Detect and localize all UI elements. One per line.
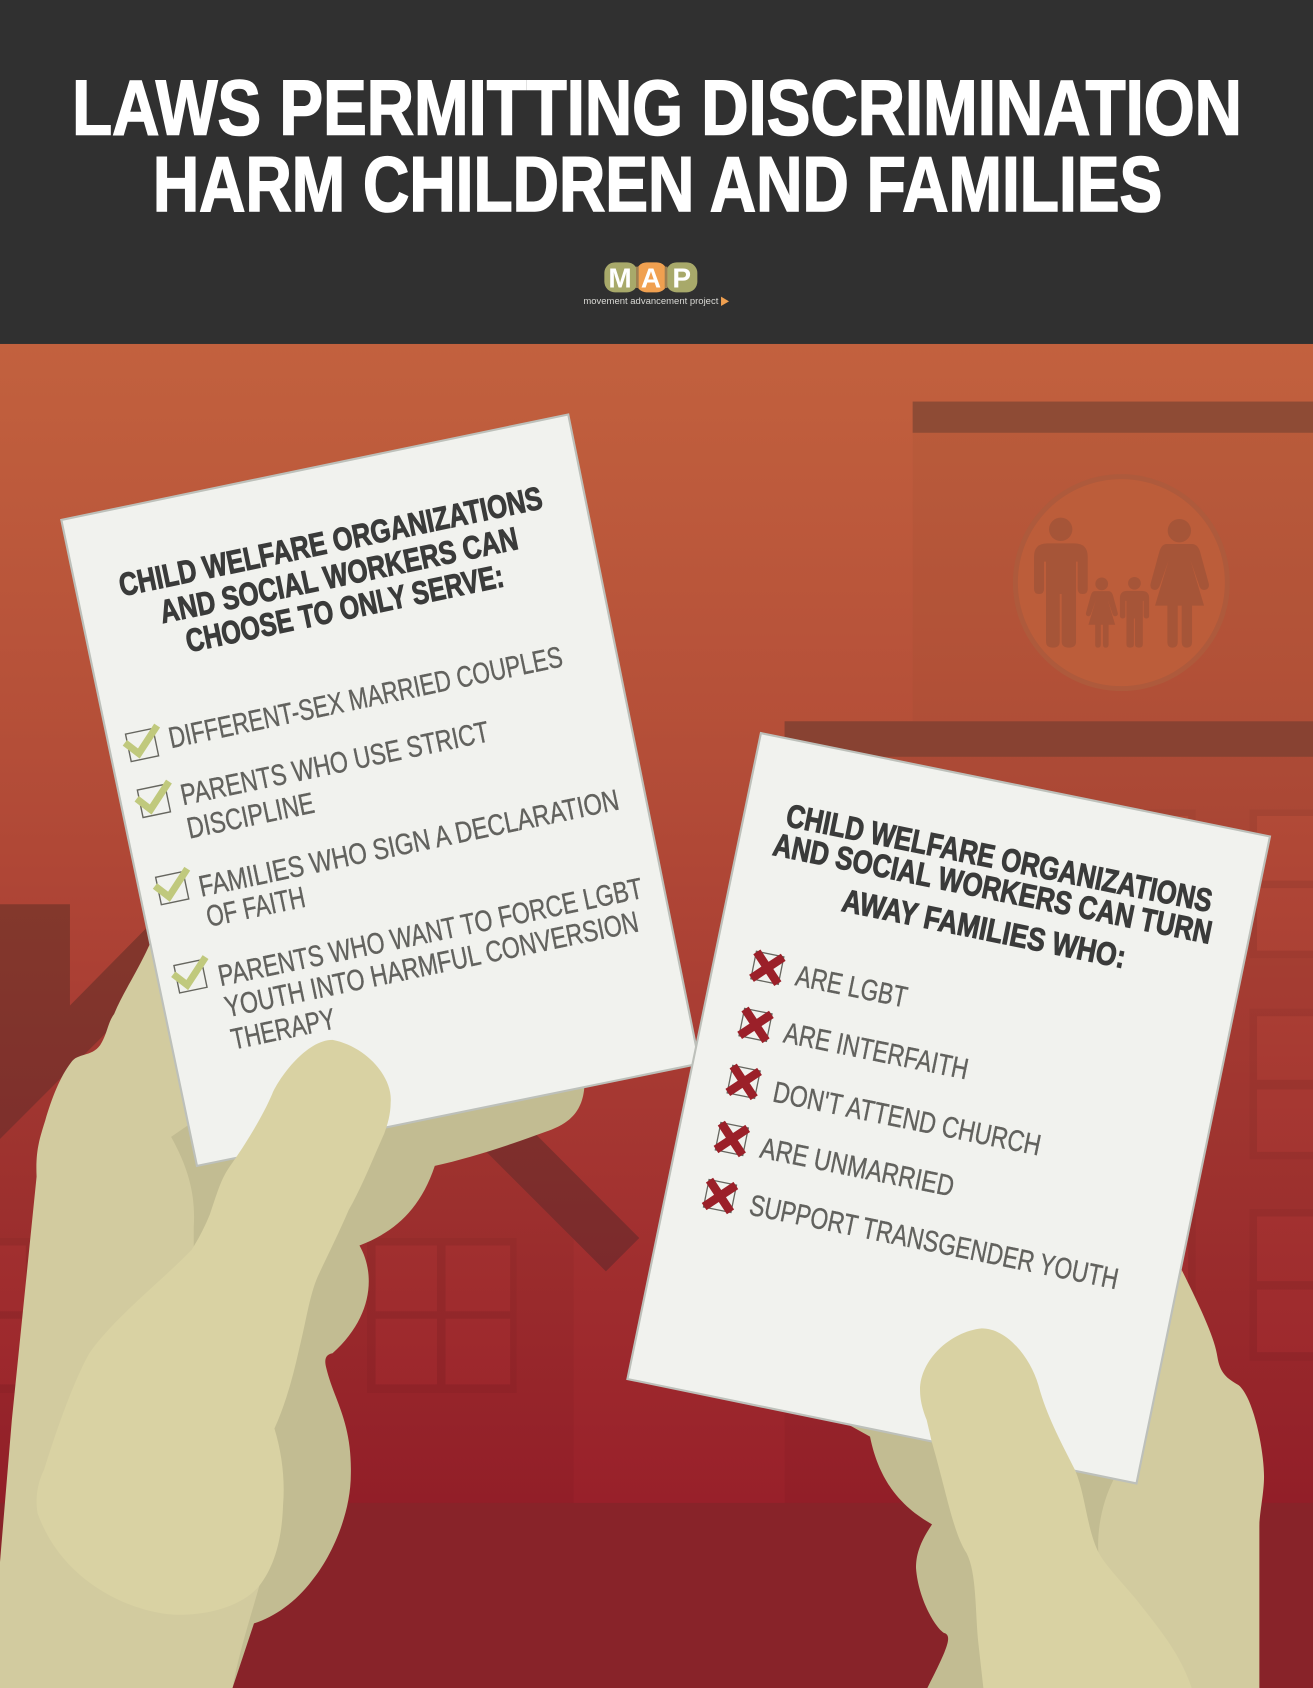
card heading: CHILD WELFARE ORGANIZATIONS [116, 480, 545, 603]
panel: card serve list [61, 414, 700, 1166]
right hand: thumb [920, 1328, 1192, 1688]
item: conversion therapy: YOUTH INTO HARMFUL CONVERSION [222, 906, 641, 1024]
logo: MAP: P [672, 262, 691, 293]
item: are LGBT [751, 951, 910, 1014]
logo: MAP: M [608, 262, 632, 293]
item: are unmarried: ARE UNMARRIED [757, 1132, 957, 1203]
item: don't attend church [727, 1065, 1044, 1162]
logo: MAP: movement advancement project [583, 296, 719, 306]
item: conversion therapy: THERAPY [228, 1003, 338, 1056]
right building [785, 402, 1313, 1503]
item: different-sex married couples [125, 641, 566, 762]
right hand: back fingers and palm [840, 1270, 1264, 1688]
item: conversion therapy: PARENTS WHO WANT TO FORCE LGBT [215, 872, 646, 993]
item: strict discipline: DISCIPLINE [184, 787, 317, 845]
card heading: AWAY FAMILIES WHO: [839, 882, 1129, 975]
item: different-sex married couples: DIFFERENT-SEX MARRIED COUPLES [166, 641, 566, 755]
item: are LGBT: ARE LGBT [793, 960, 910, 1014]
logo: MAP [583, 262, 729, 306]
card heading [770, 797, 1215, 975]
card heading: CHOOSE TO ONLY SERVE: [182, 558, 507, 659]
item: declaration of faith: FAMILIES WHO SIGN A DECLARATION [196, 784, 622, 904]
card heading: CHILD WELFARE ORGANIZATIONS [783, 797, 1215, 919]
item: declaration of faith [155, 784, 622, 934]
left hand: back fingers [108, 1077, 585, 1688]
item: strict discipline: PARENTS WHO USE STRICT [178, 716, 492, 812]
icon: family in circle [1015, 477, 1227, 689]
header band [0, 0, 1313, 344]
item: support transgender youth [703, 1180, 1121, 1296]
left house [0, 835, 639, 1503]
left hand: palm [0, 932, 259, 1688]
left hand: thumb and palm highlight [37, 1040, 391, 1615]
card heading: AND SOCIAL WORKERS CAN TURN [770, 826, 1215, 951]
item: are interfaith: ARE INTERFAITH [781, 1017, 971, 1086]
item: conversion therapy [173, 872, 646, 1056]
item: declaration of faith: OF FAITH [203, 881, 308, 934]
card heading [116, 480, 545, 659]
panel: card turn away list [627, 733, 1270, 1483]
item: support transgender youth: SUPPORT TRANSGENDER YOUTH [747, 1189, 1121, 1296]
item: strict discipline [137, 716, 492, 845]
card heading: AND SOCIAL WORKERS CAN [157, 520, 521, 630]
item: don't attend church: DON'T ATTEND CHURCH [770, 1076, 1044, 1162]
item: are interfaith [739, 1008, 971, 1086]
title [72, 66, 1242, 228]
logo: MAP: A [641, 262, 661, 293]
item: are unmarried [715, 1122, 957, 1203]
panel: scene background [0, 343, 1313, 1688]
ground [0, 1503, 1313, 1688]
